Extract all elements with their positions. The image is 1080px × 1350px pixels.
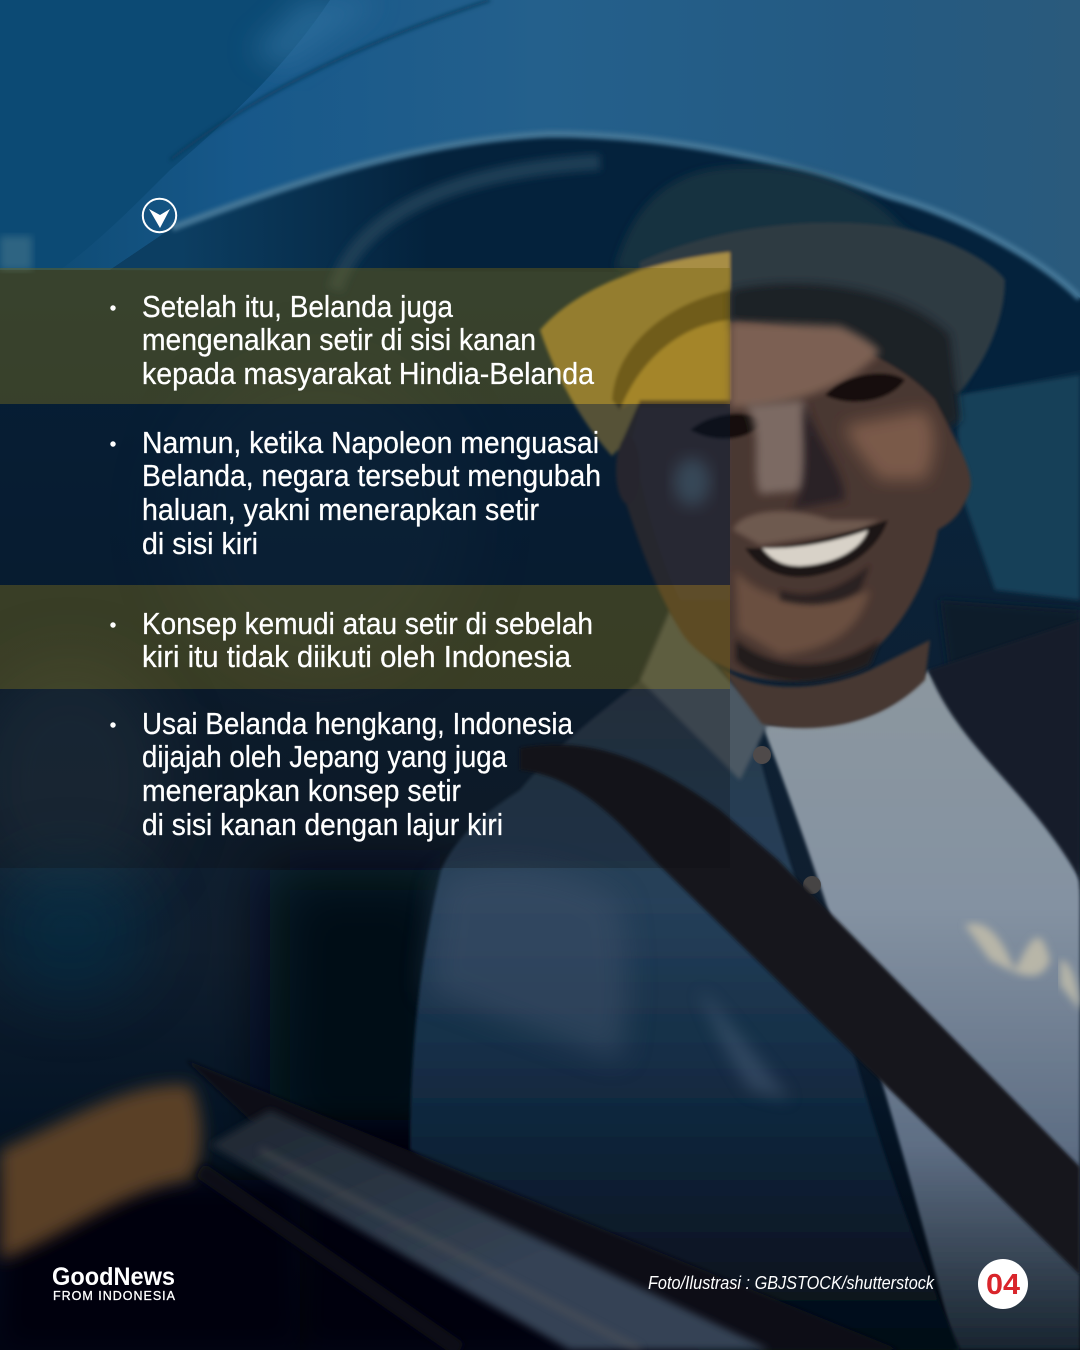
right jacket panel [928, 620, 1080, 880]
bullet point 1: kepada masyarakat Hindia-Belanda [142, 356, 595, 391]
bullet point 2: Namun, ketika Napoleon menguasai [142, 425, 599, 460]
hat inner yellow [620, 320, 730, 410]
logo: GoodNews from Indonesia: GoodNews [52, 1263, 175, 1291]
bullet point 3 [110, 606, 593, 674]
seat belt [520, 745, 1080, 1275]
hand [0, 1085, 201, 1260]
door frame dark [186, 1060, 900, 1350]
nose bright [745, 400, 809, 494]
bullet point 3: Konsep kemudi atau setir di sebelah [142, 606, 593, 641]
band 2: dark navy [0, 404, 730, 585]
interior light band [335, 162, 600, 290]
bullet point 1: Setelah itu, Belanda juga [142, 289, 454, 324]
forehead light [730, 322, 880, 408]
teeth [762, 530, 868, 566]
bullet point 3: kiri itu tidak diikuti oleh Indonesia [142, 639, 572, 674]
bullet point 4: di sisi kanan dengan lajur kiri [142, 807, 503, 842]
t-shirt [762, 670, 1080, 1350]
logo: GoodNews from Indonesia: FROM INDONESIA [53, 1289, 176, 1303]
hat brim far side [640, 223, 1005, 395]
collar [640, 610, 770, 780]
photo credit: Foto/Ilustrasi : GBJSTOCK/shutterstock [648, 1273, 935, 1293]
roof arc highlight [172, 134, 1080, 298]
bullet point 4: Usai Belanda hengkang, Indonesia [142, 706, 574, 741]
roof crease [170, 0, 490, 160]
bullet point 1: mengenalkan setir di sisi kanan [142, 322, 536, 357]
band 4: dark navy [0, 689, 730, 868]
band 1: olive highlight [0, 268, 730, 404]
band 3: olive highlight [0, 585, 730, 689]
car roof [0, 0, 1080, 298]
hat crown [615, 166, 1000, 392]
sky through window [957, 375, 1080, 600]
logo: GoodNews from Indonesia [52, 1263, 176, 1303]
hat and face [540, 166, 1005, 681]
left face band shading [632, 408, 730, 600]
dark under arc [110, 134, 1080, 395]
hat band [612, 290, 730, 410]
bullet point 2: di sisi kiri [142, 526, 258, 561]
chin [735, 570, 870, 655]
hat brim near side [540, 252, 730, 456]
mouth [745, 520, 888, 577]
upper lip [733, 511, 880, 545]
page number badge [978, 1259, 1028, 1309]
right background [940, 600, 1080, 900]
page number badge: 04 [986, 1269, 1020, 1301]
neck [700, 640, 930, 728]
icon: circled down arrow [143, 199, 176, 232]
door strip [210, 1110, 770, 1350]
denim jacket [410, 660, 960, 1350]
nose shadow [790, 400, 845, 510]
sunlight patch [965, 924, 1050, 976]
bullet point 4 [110, 706, 574, 842]
bullet point 1 [110, 289, 595, 391]
bullet point 4: dijajah oleh Jepang yang juga [142, 739, 508, 774]
right cheek [845, 410, 934, 480]
eyes [690, 414, 762, 439]
bullet point 4: menerapkan konsep setir [142, 773, 461, 808]
face base [618, 322, 971, 681]
bullet point 2: Belanda, negara tersebut mengubah [142, 458, 601, 493]
under brim shadow [730, 284, 960, 440]
bullet point 2 [110, 425, 601, 561]
bullet point 2: haluan, yakni menerapkan setir [142, 492, 539, 527]
ear [616, 436, 640, 504]
